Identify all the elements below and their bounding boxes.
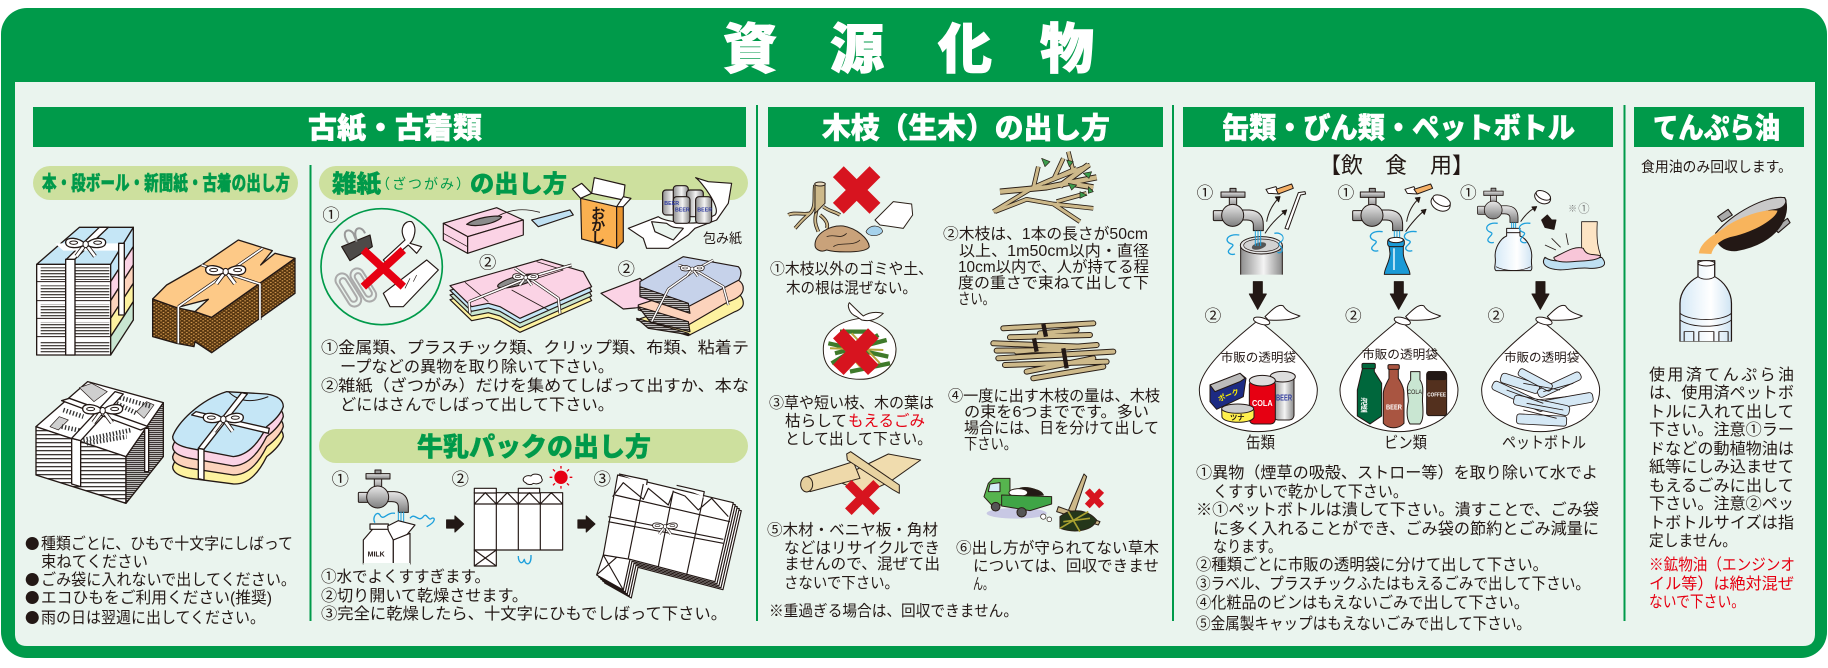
illustrations: wood and truck (801, 452, 1102, 532)
illustrations: rinse steps and bags: BEER (1276, 393, 1292, 403)
text block: bundling rules: ● (25, 569, 40, 590)
text block: how to dispose of tempura oil: 紙等にしみ込ませて (1649, 458, 1794, 476)
text block: branch notes 5 (767, 521, 940, 592)
text block: can and bottle instructions: なります。 (1213, 538, 1282, 556)
text block: mixed paper instructions: ②雑紙（ざつがみ）だけを集めてしばって出すか、本な (321, 376, 749, 395)
text block: can and bottle instructions: ①異物（煙草の吸殻、ストロー等）を取り除いて水でよ (1196, 464, 1598, 482)
illustrations: rinse steps and bags: 市販の透明袋 (1504, 351, 1579, 365)
text block: how to dispose of tempura oil: は、使用済ペットボ (1649, 384, 1794, 402)
illustrations: mixed paper items: ② (618, 259, 635, 279)
note: edible oil only: 食用油のみ回収します。 (1641, 159, 1792, 176)
illustrations: rinse steps and bags: BEER (1386, 402, 1403, 411)
text block: bundling rules: エコひもをご利用ください(推奨) (41, 589, 272, 607)
text block: can and bottle instructions: に多く入れることができ、ごみ袋の節約とごみ減量に (1213, 520, 1599, 538)
text block: branch notes 3: ③草や短い枝、木の葉は (769, 394, 934, 412)
text block: branch notes 5: さないで下さい。 (784, 574, 899, 592)
illustrations: rinse steps and bags: ① (1460, 183, 1477, 202)
text block: branch notes 2: 度の重さで束ねて出して下 (958, 274, 1149, 292)
panel: 古紙・古着類 (25, 107, 749, 628)
heading: てんぷら油: てんぷら油 (1653, 112, 1780, 145)
illustrations: rinse steps and bags: 市販の透明袋 (1221, 351, 1296, 365)
text block: milk carton instructions: ①水でよくすすぎます。 (321, 568, 490, 586)
text block: bundling rules: ごみ袋に入れないで出してください。 (41, 571, 296, 589)
illustrations: milk carton steps (332, 466, 741, 598)
illustrations: mixed paper items: か (591, 218, 605, 234)
illustrations: rinse steps and bags: ② (1488, 307, 1505, 326)
text block: how to dispose of tempura oil: トルに入れて出して (1649, 403, 1794, 421)
text block: branch notes 3: として出して下さい。 (785, 430, 932, 448)
heading: 木枝（生木）の出し方 (768, 107, 1163, 147)
text block: can and bottle instructions: ③ラベル、プラスチックふたはもえるごみで出して下さい。 (1196, 575, 1590, 593)
illustrations: rinse steps and bags: COLA (1407, 389, 1422, 396)
illustrations: mixed paper items: ① (322, 205, 340, 225)
illustrations: rinse steps and bags: ※ (1568, 203, 1577, 213)
illustrations: bundled books, cardboard, newspapers, clothes (36, 227, 295, 503)
text block: branch notes 4 (948, 387, 1160, 453)
labels: bag types: 缶類 (1246, 434, 1275, 452)
illustrations: mixed paper items: ② (479, 252, 496, 272)
text block: milk carton instructions: ③完全に乾燥したら、十文字にひもでしばって下さい。 (321, 605, 727, 623)
illustrations: milk carton steps: ① (332, 469, 349, 489)
text block: how to dispose of tempura oil: 下さい。注意②ペッ (1649, 495, 1794, 513)
text block: branch notes 2: 10cm以内で、人が持てる程 (958, 258, 1149, 276)
illustrations: rinse steps and bags: COFFEE (1427, 393, 1446, 399)
text block: branch notes 5: ⑤木材・ベニヤ板・角材 (767, 521, 938, 539)
text block: bundling rules: 雨の日は翌週に出してください。 (41, 609, 265, 627)
subheading: 本・段ボール・新聞紙・古着の出し方 (33, 166, 298, 200)
illustrations: rinse steps and bags: COLA (1252, 398, 1273, 408)
text block: how to dispose of tempura oil: もえるごみに出して (1649, 477, 1794, 495)
labels: bag types: ビン類 (1384, 434, 1427, 452)
illustrations: mixed paper items: BEER (697, 208, 712, 214)
text block: can and bottle instructions (1196, 464, 1599, 633)
illustrations: mixed paper items: BEER (675, 208, 690, 214)
text block: branch notes 6: については、回収できませ (973, 557, 1159, 575)
text block: bundling rules (25, 533, 296, 628)
text block: can and bottle instructions: ⑤金属製キャップはもえないごみで出して下さい。 (1196, 615, 1531, 633)
subheading: 牛乳パックの出し方 (319, 429, 748, 463)
text block: branch notes 4: 下さい。 (964, 435, 1017, 453)
text block: how to dispose of tempura oil: ドなどの動植物油は (1649, 440, 1794, 458)
text block: bundling rules: ● (25, 607, 40, 628)
text block: how to dispose of tempura oil (1649, 366, 1794, 550)
text block: bundling rules: 種類ごとに、ひもで十文字にしばって (41, 535, 293, 553)
warning: mineral oil: イル等）は絶対混ぜ (1649, 575, 1794, 593)
text block: branch notes 5: などはリサイクルでき (784, 539, 940, 557)
subheading: 雑紙の出し方 (319, 166, 748, 200)
illustrations: mixed paper items (321, 178, 743, 336)
illustrations: rinse steps and bags: ① (1197, 183, 1214, 202)
subheading: 雑紙の出し方: （ざつがみ） (376, 176, 470, 192)
text block: branch notes 1: 木の根は混ぜない。 (786, 279, 917, 297)
illustrations: rinse steps and bags: ② (1345, 307, 1362, 326)
heading: 古紙・古着類: 古紙・古着類 (308, 112, 482, 145)
text block: branch notes 6 (956, 539, 1159, 593)
text block: branch notes 2 (943, 225, 1150, 308)
text block: how to dispose of tempura oil: 下さい。注意①ラー (1649, 421, 1794, 439)
illustrations: rinse steps and bags (1197, 183, 1605, 432)
text block: mixed paper instructions: ①金属類、プラスチック類、クリップ類、布類、粘着テ (321, 339, 749, 357)
subheading: 雑紙の出し方: 雑紙 (332, 171, 381, 198)
text block: branch notes 1 (770, 259, 933, 297)
illustrations: rinse steps and bags: 盛 (1360, 404, 1368, 413)
illustrations: rinse steps and bags: ② (1205, 307, 1222, 326)
text block: milk carton instructions: ②切り開いて乾燥させます。 (321, 587, 528, 605)
subheading: 雑紙の出し方: の出し方 (470, 170, 567, 198)
note: overweight: ※重過ぎる場合は、回収できません。 (769, 602, 1018, 620)
text block: branch notes 2: ②木枝は、1本の長さが50cm (943, 225, 1148, 243)
illustrations: milk carton steps: ② (452, 469, 469, 489)
text block: can and bottle instructions: ※①ペットボトルは潰して下さい。潰すことで、ごみ袋 (1196, 501, 1599, 519)
illustrations: milk carton steps: ③ (594, 469, 611, 489)
text block: bundling rules: ● (25, 533, 40, 554)
text block: can and bottle instructions: ④化粧品のビンはもえないごみで出して下さい。 (1196, 594, 1529, 612)
warning: mineral oil (1649, 556, 1795, 611)
text block: branch notes 4: の束を6つまでです。多い (964, 403, 1149, 421)
label: 包み紙: 包み紙 (703, 231, 742, 246)
panel: てんぷら油 (1634, 107, 1804, 611)
text block: how to dispose of tempura oil: トボトルサイズは指 (1649, 514, 1794, 532)
illustrations: rinse steps and bags: ツナ (1230, 413, 1245, 422)
heading: 古紙・古着類 (33, 107, 746, 147)
text block: branch notes 5: ませんので、混ぜて出 (784, 555, 940, 573)
heading: 木枝（生木）の出し方: 木枝（生木）の出し方 (822, 112, 1110, 145)
text block: branch notes 2: さい。 (958, 290, 995, 308)
warning: mineral oil: ※鉱物油（エンジンオ (1649, 556, 1795, 574)
subheading: 牛乳パックの出し方: 牛乳パックの出し方 (417, 432, 651, 462)
text block: branch notes 6: ⑥出し方が守られてない草木 (956, 539, 1159, 557)
illustrations: rinse steps and bags: ポーク (1217, 387, 1240, 403)
text block: bundling rules: ● (25, 587, 40, 608)
text block: branch notes 3: もえるごみ (848, 412, 925, 430)
text block: milk carton instructions (321, 568, 727, 623)
illustrations: rinse steps and bags: 市販の透明袋 (1362, 347, 1438, 361)
text block: can and bottle instructions: ②種類ごとに市販の透明袋に分けて出して下さい。 (1196, 556, 1548, 574)
text block: how to dispose of tempura oil: 使用済てんぷら油 (1649, 366, 1794, 384)
illustrations: rinse steps and bags: ① (1338, 183, 1355, 202)
text block: branch notes 4: ④一度に出す木枝の量は、木枝 (948, 387, 1160, 405)
panel: 木枝（生木）の出し方 (767, 107, 1163, 620)
text block: branch notes 1: ①木枝以外のゴミや土、 (770, 259, 933, 278)
illustration: pouring oil into a PET bottle (1679, 197, 1790, 343)
illustrations: rinse steps and bags: 泡 (1360, 397, 1368, 406)
text block: branch notes 4: 場合には、日を分けて出して (964, 419, 1159, 437)
text block: mixed paper instructions: ープなどの異物を取り除いて下さい。 (340, 358, 614, 376)
text block: branch notes 6: ん。 (973, 576, 993, 593)
text block: can and bottle instructions: くすすいで乾かして下さい。 (1213, 483, 1408, 501)
subheading: 本・段ボール・新聞紙・古着の出し方: 本・段ボール・新聞紙・古着の出し方 (42, 171, 290, 195)
text block: mixed paper instructions (321, 339, 749, 414)
illustrations: milk carton steps: MILK (368, 552, 385, 559)
text block: branch notes 3: 枯らして (785, 412, 847, 430)
illustrations: branches upper (788, 152, 1113, 379)
labels: bag types: ペットボトル (1502, 434, 1586, 452)
illustrations: mixed paper items: BEER (664, 201, 679, 207)
warning: mineral oil: ないで下さい。 (1649, 593, 1745, 611)
subtitle: 飲食用: 【飲食用】 (1319, 153, 1474, 178)
labels: bag types (1246, 434, 1586, 452)
title: 資源化物 (723, 20, 1094, 80)
illustrations: mixed paper items: お (591, 205, 605, 221)
text block: branch notes 2: 以上、1m50cm以内・直径 (959, 242, 1150, 260)
text block: bundling rules: 束ねてください (41, 553, 148, 571)
heading: てんぷら油 (1634, 107, 1804, 147)
panel: 缶類・びん類・ペットボトル (1183, 107, 1613, 633)
text block: mixed paper instructions: どにはさんでしばって出して下さい。 (340, 396, 614, 414)
text block: branch notes 3 (769, 394, 934, 448)
heading: 缶類・びん類・ペットボトル: 缶類・びん類・ペットボトル (1222, 112, 1575, 145)
text block: how to dispose of tempura oil: 定しません。 (1649, 532, 1737, 550)
illustrations: rinse steps and bags: ① (1578, 203, 1590, 216)
illustrations: mixed paper items: し (591, 229, 605, 245)
